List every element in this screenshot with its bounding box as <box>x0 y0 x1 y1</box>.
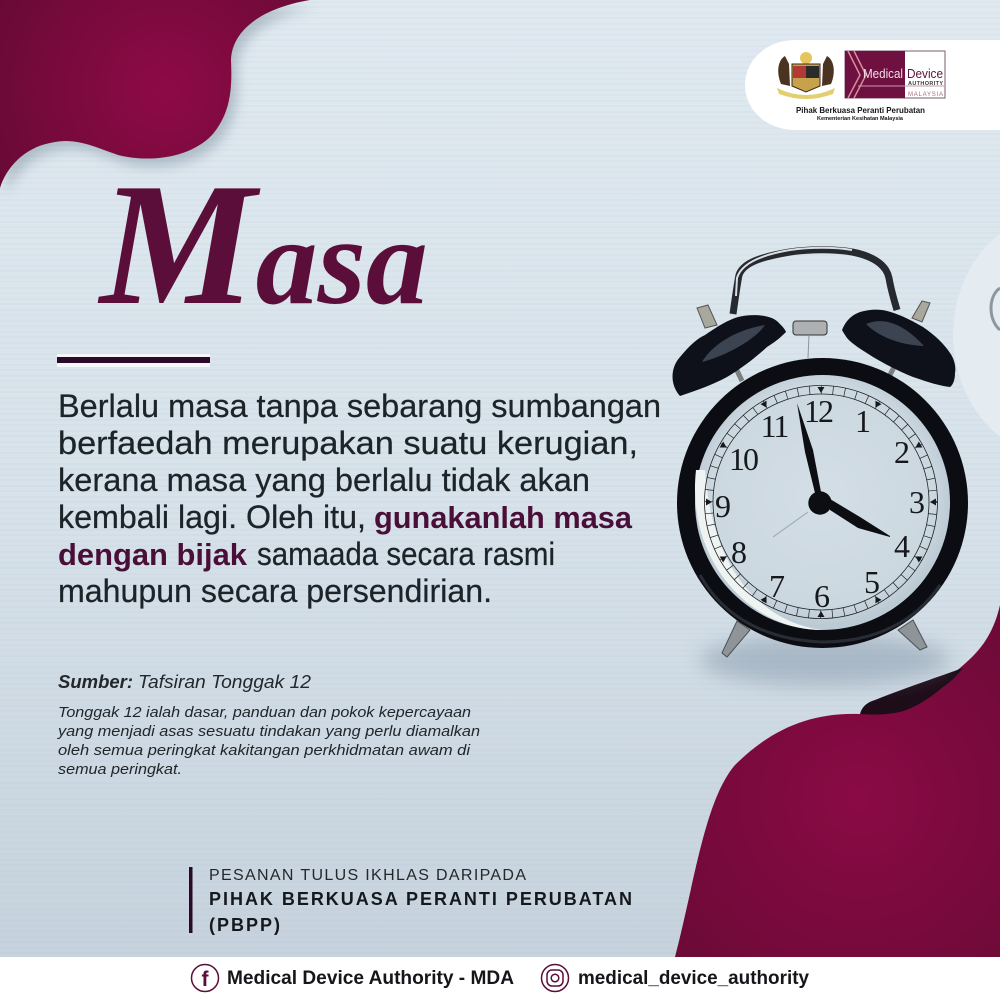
clock shadow <box>700 634 950 686</box>
title: Masa <box>97 147 428 341</box>
hammer <box>793 321 827 358</box>
plate at right edge <box>953 210 1000 460</box>
footer bar <box>0 957 1000 1000</box>
icon: facebook: f <box>202 968 210 991</box>
icon: instagram <box>542 964 568 992</box>
clock numerals: 1 <box>855 403 871 439</box>
wind-up knobs <box>697 301 930 328</box>
MDA logo <box>845 51 945 98</box>
title underline <box>57 354 210 367</box>
main paragraph: kerana masa yang berlalu tidak akan <box>58 462 590 498</box>
clock numerals: 6 <box>814 578 830 614</box>
source description: oleh semua peringkat kakitangan perkhidmatan awam di <box>58 742 471 759</box>
message block <box>189 867 632 935</box>
source line: Sumber: <box>58 672 133 692</box>
clock numerals: 8 <box>731 534 747 570</box>
source line <box>58 672 311 692</box>
source line: Tafsiran Tonggak 12 <box>138 672 311 692</box>
source description: Tonggak 12 ialah dasar, panduan dan pokok kepercayaan <box>58 704 471 721</box>
bell posts <box>733 361 897 381</box>
source description <box>57 704 480 778</box>
highlight continued: dengan bijak <box>58 537 248 572</box>
clock numerals: 7 <box>769 568 785 604</box>
rim <box>677 358 968 648</box>
face <box>695 375 950 630</box>
MDA logo: Medical <box>863 67 903 81</box>
main paragraph: berfaedah merupakan suatu kerugian, <box>58 425 638 461</box>
MDA logo: AUTHORITY <box>908 81 943 87</box>
message block: PIHAK BERKUASA PERANTI PERUBATAN <box>209 889 632 909</box>
icon: facebook <box>192 964 218 992</box>
bottom-right maroon blob <box>675 605 1000 957</box>
message block: (PBPP) <box>209 915 280 935</box>
MDA logo: Device <box>907 67 943 81</box>
main paragraph <box>58 388 661 609</box>
instagram handle: medical_device_authority <box>578 968 809 989</box>
main paragraph: samaada secara rasmi <box>257 536 555 572</box>
clock numerals: 3 <box>909 484 925 520</box>
clock hands <box>773 403 890 537</box>
feet <box>722 620 927 657</box>
main paragraph: kembali lagi. Oleh itu, <box>58 499 366 535</box>
left bell <box>672 315 786 396</box>
dark shadow patch on blob <box>860 668 963 715</box>
top-left maroon blob <box>0 0 316 196</box>
highlight: use time wisely: gunakanlah masa <box>374 500 633 535</box>
five-minute markers <box>706 387 936 617</box>
handle <box>733 250 897 314</box>
source description: semua peringkat. <box>58 761 182 778</box>
clock numerals: 10 <box>729 441 758 477</box>
clock numerals: 11 <box>761 408 788 444</box>
ministry name: Kementerian Kesihatan Malaysia <box>817 116 904 122</box>
clock numerals: 9 <box>715 488 731 524</box>
clock numerals <box>715 393 925 614</box>
clock numerals: 2 <box>894 434 910 470</box>
authority name: Pihak Berkuasa Peranti Perubatan <box>796 105 925 115</box>
crest of Malaysia <box>777 52 835 99</box>
right bell <box>842 310 955 387</box>
logo pill <box>745 40 1000 130</box>
alarm clock <box>672 248 968 686</box>
main paragraph: mahupun secara persendirian. <box>58 573 492 609</box>
minute track <box>704 386 938 618</box>
MDA logo: MALAYSIA <box>908 92 943 98</box>
facebook handle: Medical Device Authority - MDA <box>227 968 514 989</box>
main paragraph: Berlalu masa tanpa sebarang sumbangan <box>58 388 661 424</box>
clock numerals: 12 <box>804 393 833 429</box>
clock numerals: 4 <box>894 528 910 564</box>
source description: yang menjadi asas sesuatu tindakan yang perlu diamalkan <box>57 723 480 740</box>
message block: PESANAN TULUS IKHLAS DARIPADA <box>209 867 526 884</box>
clock numerals: 5 <box>864 564 880 600</box>
